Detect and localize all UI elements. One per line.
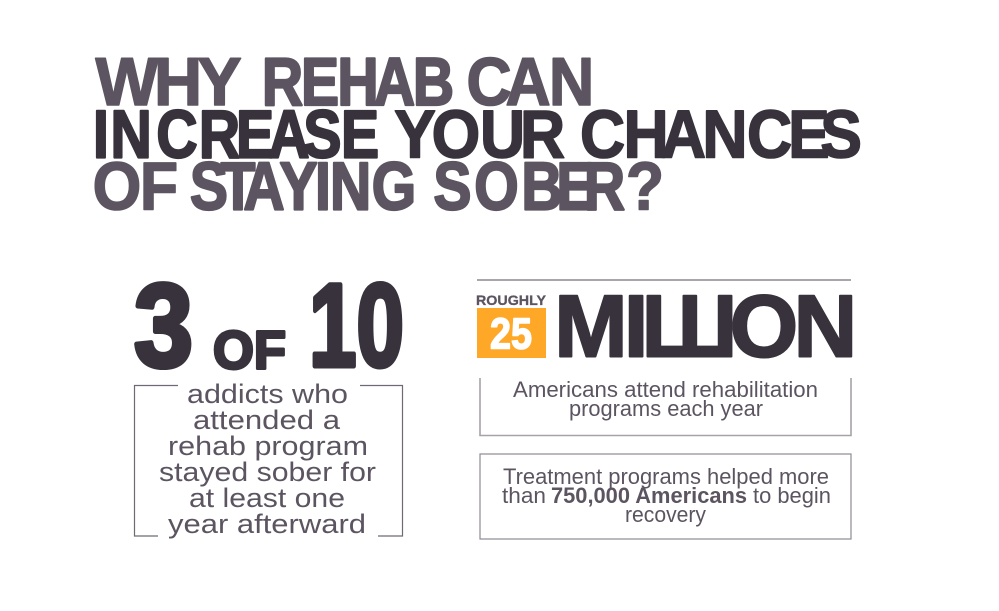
big stat: 3 of 10: 3: [134, 260, 193, 392]
description text: rehab program: [168, 431, 368, 461]
big stat: 3 of 10: [134, 260, 404, 392]
title: OF: [93, 148, 178, 224]
panel: 25 million: [476, 276, 857, 539]
box: americans attend: [480, 377, 851, 436]
orange badge: 25: [477, 308, 546, 358]
description text: attended a: [193, 405, 341, 435]
description text: [159, 379, 376, 539]
box: treatment programs: Treatment programs helped more: [503, 464, 829, 489]
panel: 3 of 10: [134, 260, 404, 539]
description text: stayed sober for: [159, 457, 376, 487]
box: treatment programs: [480, 454, 851, 539]
description text: year afterward: [168, 509, 366, 539]
box: treatment programs: than: [502, 483, 546, 508]
box: treatment programs: 750,000 Americans: [551, 483, 747, 508]
roughly label: ROUGHLY: [476, 292, 547, 308]
title: YOUR: [394, 96, 565, 172]
big stat: 3 of 10: 10: [309, 260, 404, 392]
title: SOBER: [433, 149, 625, 225]
orange badge: 25: 25: [490, 310, 532, 358]
bracket frame: [134, 386, 402, 536]
description text: addicts who: [187, 379, 348, 409]
title: CHANCES: [580, 96, 862, 172]
box: treatment programs: recovery: [625, 502, 706, 527]
box: americans attend: programs each year: [569, 396, 763, 421]
title: STAYING: [190, 149, 416, 225]
title: ?: [626, 148, 664, 224]
title: CAN: [466, 44, 594, 120]
title: INCREASE: [93, 97, 379, 173]
description text: at least one: [189, 483, 345, 513]
title: WHY: [96, 44, 242, 120]
top rule: [477, 279, 851, 281]
box: treatment programs: to begin: [753, 483, 831, 508]
title: [93, 44, 862, 225]
box: americans attend: Americans attend rehabilitation: [513, 377, 818, 402]
big stat: 3 of 10: OF: [213, 320, 286, 380]
title: REHAB: [262, 44, 454, 120]
million: MILLION: [554, 276, 857, 376]
